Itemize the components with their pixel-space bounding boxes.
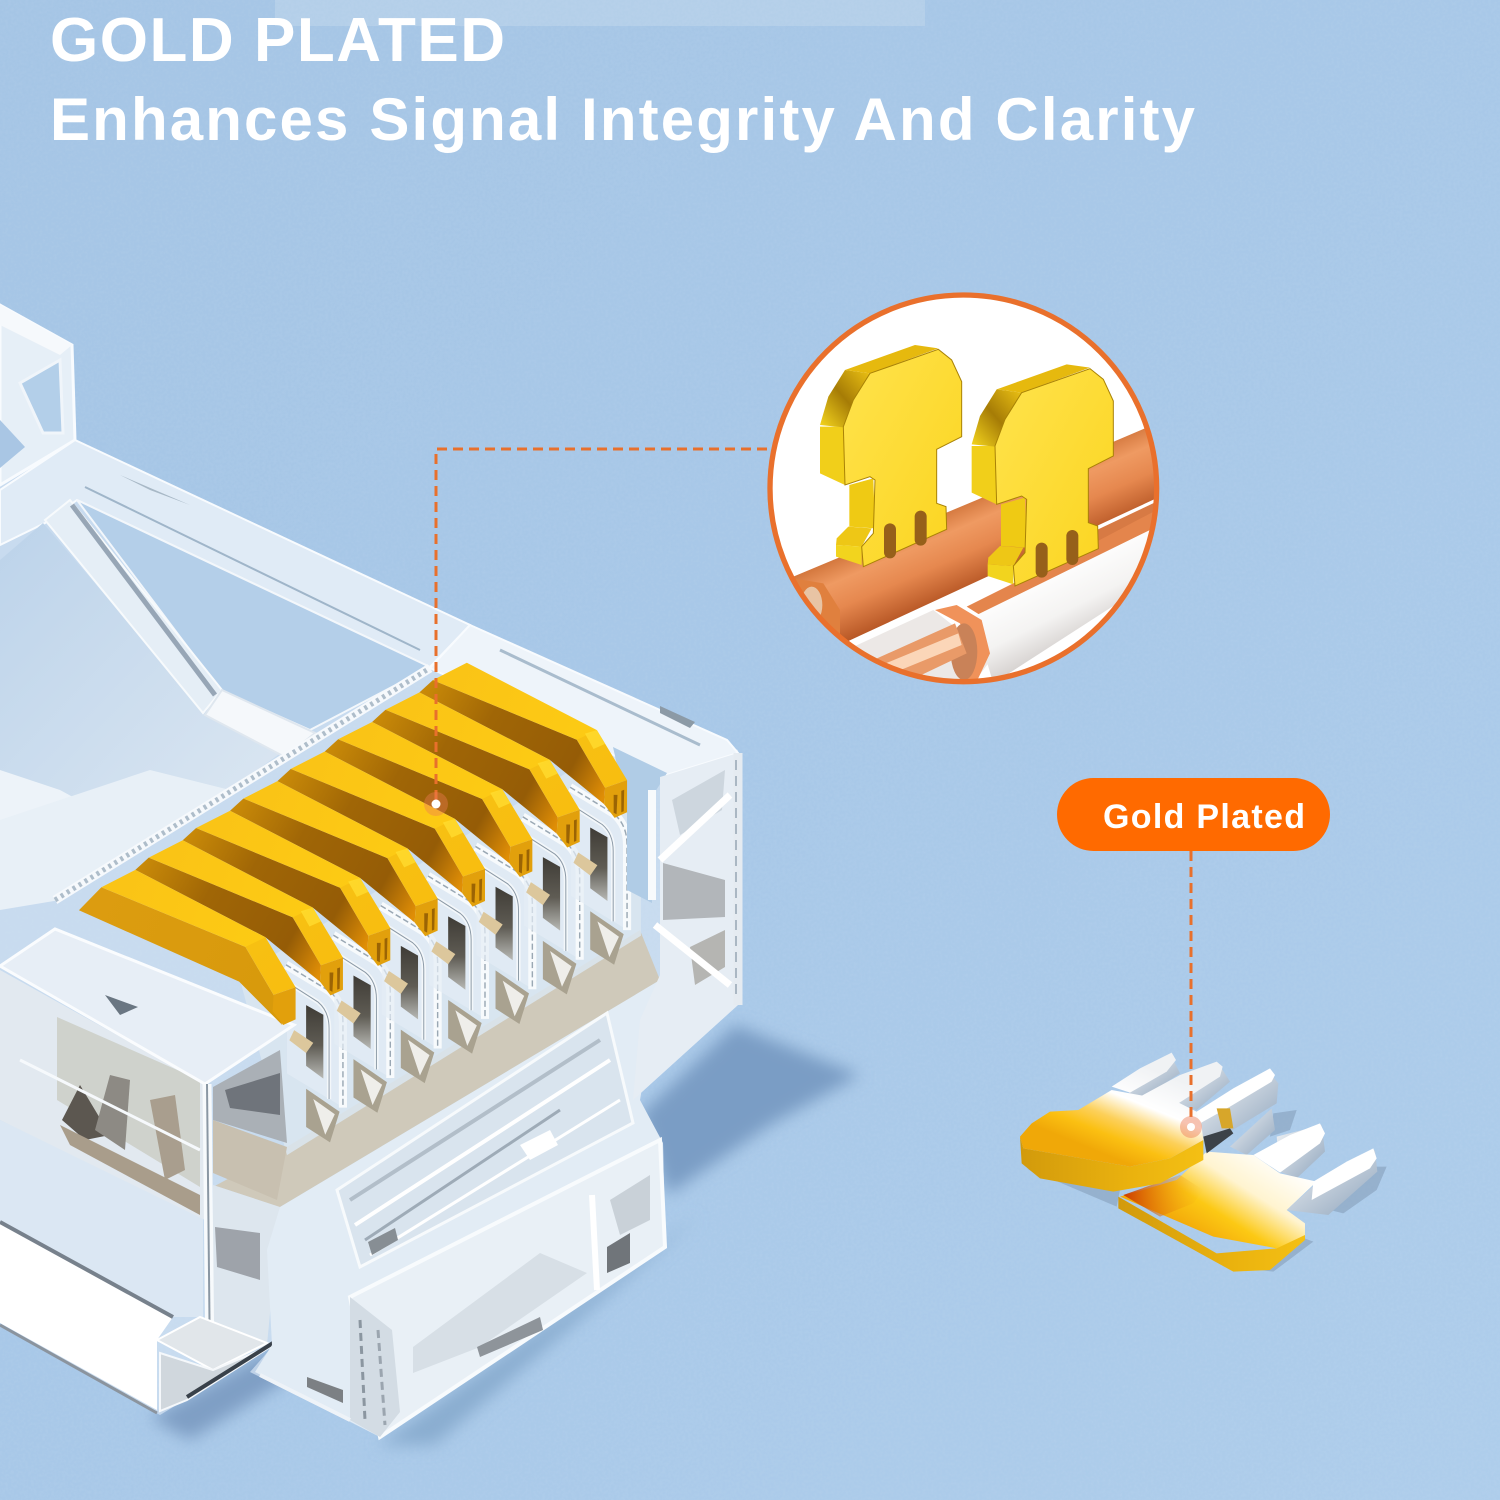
connector upper body xyxy=(0,305,738,1437)
lower front block xyxy=(255,980,665,1437)
lower contact xyxy=(1118,1108,1377,1272)
callout pill: Gold Plated: Gold Plated xyxy=(1103,798,1305,836)
left lower slab xyxy=(0,1120,203,1413)
white sheathed wire xyxy=(873,510,1157,688)
left front block xyxy=(0,929,325,1411)
copper wire: rear xyxy=(793,423,1160,683)
leader line: pill to contacts xyxy=(1180,851,1202,1138)
title xyxy=(50,6,1196,153)
gold contact: right xyxy=(972,364,1113,586)
contact shadow xyxy=(1027,1110,1387,1272)
comb columns and teeth xyxy=(215,727,660,1207)
connector shadow xyxy=(150,1025,860,1445)
leader line: contact to magnified circle xyxy=(424,449,775,816)
gold plated contacts illustration xyxy=(1020,1053,1387,1272)
title: GOLD PLATED xyxy=(50,6,505,75)
gold contact: left xyxy=(820,345,962,567)
magnified circle callout xyxy=(770,295,1160,688)
callout pill: Gold Plated xyxy=(1057,778,1330,851)
right end frame xyxy=(430,625,738,1100)
gold contacts xyxy=(79,663,627,1025)
upper contact xyxy=(1020,1053,1278,1192)
RJ45 connector xyxy=(0,305,738,1437)
title: Enhances Signal Integrity And Clarity xyxy=(50,86,1196,153)
